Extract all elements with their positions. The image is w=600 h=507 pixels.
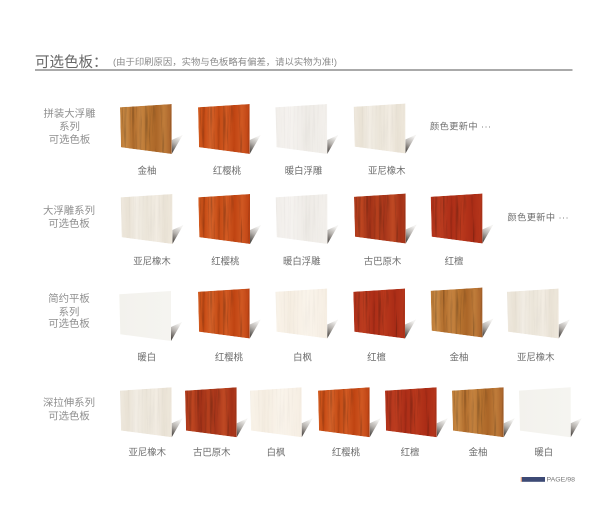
footer page marker <box>521 476 575 484</box>
subtitle note: (由于印刷原因，实物与色板略有偏差，请以实物为准!) <box>113 56 337 67</box>
swatch: 金柚 <box>452 387 515 437</box>
panel: row 4 <box>43 387 582 457</box>
panel: row 3 <box>48 288 570 363</box>
page number: PAGE/98 <box>546 476 575 484</box>
row 1 label: 系列 <box>59 120 80 133</box>
caption: 白枫: 白枫 <box>293 352 312 363</box>
swatch: 暖白 <box>119 291 182 341</box>
caption: 亚尼橡木: 亚尼橡木 <box>129 446 167 457</box>
swatch: 亚尼橡木 <box>120 387 183 437</box>
swatch: 古巴原木 <box>354 194 417 244</box>
panel: row 1 <box>44 104 491 176</box>
caption: 亚尼橡木: 亚尼橡木 <box>517 352 555 363</box>
row 3 label: 系列 <box>59 305 79 318</box>
caption: 白枫: 白枫 <box>267 446 286 457</box>
caption: 红樱桃: 红樱桃 <box>215 352 244 363</box>
swatch: 亚尼橡木 <box>354 104 416 154</box>
caption: 古巴原木: 古巴原木 <box>193 446 231 457</box>
panel: row 2 <box>43 194 568 267</box>
swatch: 亚尼橡木 <box>121 194 183 244</box>
swatch: 亚尼橡木 <box>507 288 570 338</box>
caption: 暖白: 暖白 <box>137 352 156 363</box>
swatch: 红檀 <box>385 387 448 437</box>
caption: 暖白: 暖白 <box>534 446 553 457</box>
caption: 红樱桃: 红樱桃 <box>332 446 361 457</box>
swatch: 暖白浮雕 <box>276 194 338 244</box>
swatch: 红樱桃 <box>318 387 381 437</box>
caption: 金柚: 金柚 <box>450 352 468 363</box>
caption: 红檀: 红檀 <box>401 446 419 457</box>
title: 可选色板： <box>35 53 108 71</box>
caption: 亚尼橡木: 亚尼橡木 <box>133 256 171 267</box>
swatch: 金柚 <box>431 288 493 338</box>
swatch: 红樱桃 <box>198 194 261 244</box>
caption: 红檀: 红檀 <box>367 352 386 363</box>
swatch: 白枫 <box>250 387 313 437</box>
caption: 暖白浮雕: 暖白浮雕 <box>285 165 323 176</box>
swatch: 红檀 <box>431 194 493 244</box>
row 2 label: 可选色板 <box>48 217 90 230</box>
row 4 label: 深拉伸系列 <box>43 398 95 409</box>
caption: 金柚: 金柚 <box>469 446 487 457</box>
caption: 红樱桃: 红樱桃 <box>211 256 240 267</box>
swatch: 红樱桃 <box>198 104 261 154</box>
caption: 亚尼橡木: 亚尼橡木 <box>368 165 406 176</box>
row 1 label: 可选色板 <box>49 133 91 146</box>
swatch: 暖白浮雕 <box>276 104 338 154</box>
swatch: 金柚 <box>120 104 183 154</box>
swatch: 白枫 <box>276 288 338 338</box>
note: colours updating: 颜色更新中 ··· <box>508 211 568 222</box>
swatch: 古巴原木 <box>185 387 248 437</box>
caption: 红樱桃: 红樱桃 <box>213 165 242 176</box>
caption: 红檀: 红檀 <box>445 256 463 267</box>
row 4 label: 可选色板 <box>48 409 90 422</box>
swatch: 红樱桃 <box>198 288 261 338</box>
row 1 label: 拼装大浮雕 <box>44 109 95 120</box>
caption: 暖白浮雕: 暖白浮雕 <box>283 256 321 267</box>
caption: 金柚: 金柚 <box>138 165 156 176</box>
row 3 label: 可选色板 <box>48 317 90 330</box>
row 2 label: 大浮雕系列 <box>43 206 95 217</box>
row 3 label: 简约平板 <box>48 294 90 305</box>
note: colours updating: 颜色更新中 ··· <box>430 120 491 131</box>
swatch: 暖白 <box>519 387 582 437</box>
caption: 古巴原木: 古巴原木 <box>364 256 402 267</box>
swatch: 红檀 <box>353 288 416 338</box>
